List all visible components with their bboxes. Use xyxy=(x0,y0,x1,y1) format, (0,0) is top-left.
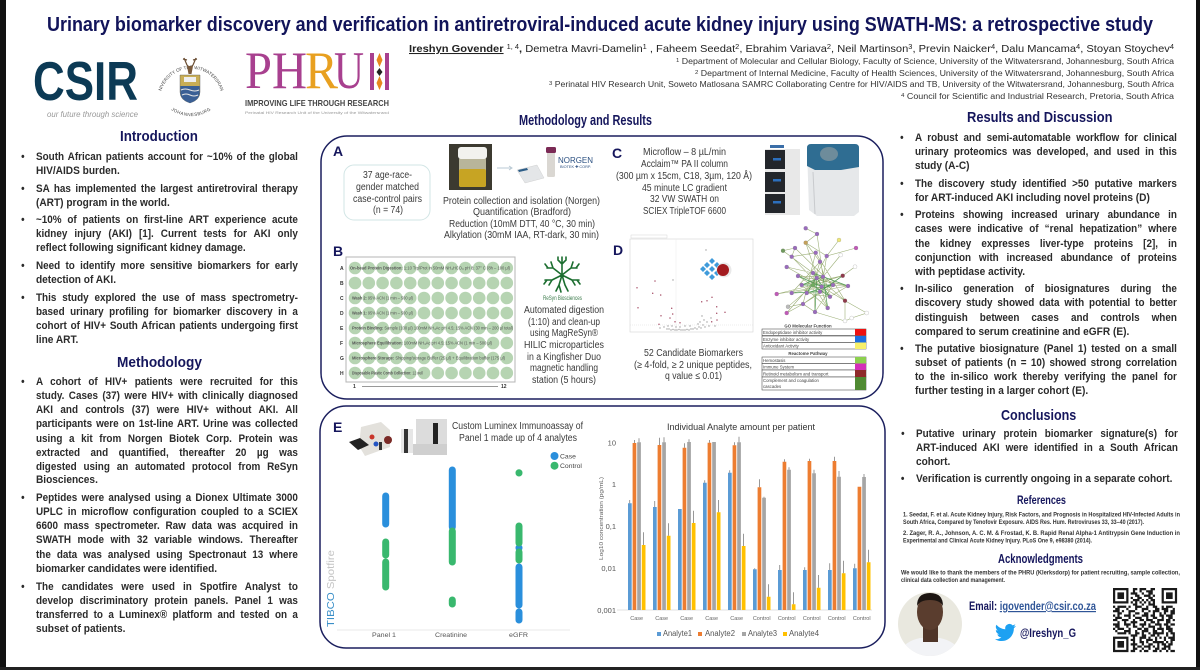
diagram: 96-well plate: 12 xyxy=(501,384,507,390)
chart: individual analyte amount per patient: 1 xyxy=(612,480,616,489)
diagram: 96-well plate: 1 xyxy=(353,384,356,390)
logo: PHRU xyxy=(245,42,389,115)
text block: results bullets: with peptidase activity. xyxy=(915,266,1025,278)
heading: methodology: Methodology xyxy=(117,354,202,371)
text block: introduction bullets xyxy=(21,151,298,346)
text block: results bullets xyxy=(900,132,1177,397)
text block: results bullets: cases were indicative of “renal hepatization” where xyxy=(915,223,1177,235)
text block: automated digestion xyxy=(524,305,604,386)
diagram: 96-well plate: Microsphere Equilibration: 100mM NH₄Ac pH 4.5; 15% ACN (1 min – 500 µl) xyxy=(352,340,492,346)
text block: LC-MS settings xyxy=(616,147,752,217)
text block: methodology bullets: AKI and controls (37) were HIV+ without AKI. All xyxy=(36,404,298,416)
text block: results bullets: the kidney expresses liver-type proteins [2], in xyxy=(915,238,1177,250)
heading: results and discussion: Results and Discussion xyxy=(967,109,1113,126)
text block: methodology bullets: develop discriminatory protein panels. Panel 1 was xyxy=(36,595,298,607)
author list: , xyxy=(519,43,522,55)
callout: case-control pairs xyxy=(344,165,430,220)
text block: sample preparation: Protein collection and isolation (Norgen) xyxy=(443,196,600,207)
icon: Spectronaut logo xyxy=(700,258,732,280)
text block: results bullets: The putative biosignature (Panel 1) tested on a small xyxy=(915,343,1177,355)
affiliations xyxy=(549,57,1175,101)
text block: LC-MS settings: Microflow – 8 µL/min xyxy=(643,147,726,158)
text block: introduction bullets: Need to identify more sensitive biomarkers for early xyxy=(36,260,298,272)
legend: analytes xyxy=(657,629,820,638)
author list: , Faheem Seedat xyxy=(647,43,735,55)
text block: immunoassay title: Panel 1 made up of 4 analytes xyxy=(459,433,577,444)
chart: individual analyte amount per patient: Case xyxy=(705,616,718,622)
author list: Demetra Mavri-Damelin xyxy=(525,43,636,55)
image: Norgen kit: BIOTEK ✚ CORP. xyxy=(560,165,591,169)
legend: analytes: Analyte4 xyxy=(789,629,820,638)
panel: results and discussion: • xyxy=(900,178,904,190)
panel label C: C xyxy=(612,145,622,161)
panel: results and discussion: • xyxy=(900,209,904,221)
text block: sample preparation: Alkylation (30mM IAA, RT-dark, 30 min) xyxy=(444,230,599,241)
text block: methodology bullets: 6600 mass spectrometer. Raw data was acquired in xyxy=(36,520,298,532)
panel: methodology: • xyxy=(21,376,25,388)
text block: introduction bullets: This study explored the use of mass spectrometry- xyxy=(36,292,298,304)
logo: PHRU: U xyxy=(334,42,364,100)
text block: reference list: 2. Zager, R. A., Johnson, A. C. M. & Frostad, K. B. Rapid Renal Alpha-1 Antitrypsin Gene Induction in xyxy=(903,530,1180,537)
chart: individual analyte amount per patient: 0,1 xyxy=(606,522,616,531)
text block: results bullets: urinary proteomics was developed, and used in this xyxy=(915,146,1177,158)
logo: ReSyn Biosciences: ReSyn Biosciences xyxy=(543,296,582,302)
chart: individual analyte amount per patient: Control xyxy=(778,616,796,622)
legend: case and control: Case xyxy=(560,454,576,460)
panel: results and discussion xyxy=(900,109,1177,397)
text block: methodology bullets: The candidates were used in Spotfire Analyst to xyxy=(36,581,298,593)
author list: 4 xyxy=(991,44,995,51)
text block: acknowledgments: clinical data collection and management. xyxy=(901,577,1005,584)
logo: PHRU: PH xyxy=(245,42,307,100)
legend: GO and Reactome xyxy=(762,324,866,390)
chart: strip plot of Panel 1, Creatinine and eGFR xyxy=(326,452,582,639)
affiliations: Perinatal HIV Research Unit, Soweto Matlosana SAMRC Collaborating Centre for HIV/AIDS and TB, University of the Witwatersrand, Johannesburg, South Africa xyxy=(552,80,1175,89)
text block: methodology bullets: digested using an automated protocol from ReSyn xyxy=(36,461,298,473)
logo: CSIR: CSIR xyxy=(33,50,138,112)
image: Norgen kit: NORGEN xyxy=(558,155,593,165)
panel: results and discussion: • xyxy=(900,283,904,295)
text block: conclusions bullets xyxy=(901,428,1178,485)
icon: twitter bird xyxy=(995,624,1016,641)
text block: introduction bullets: kidney injury (AKI) [1]. Current tests for AKI only xyxy=(36,228,298,240)
text block: sample preparation: Reduction (10mM DTT, 40 °C, 30 min) xyxy=(449,219,595,230)
heading: references: References xyxy=(1017,493,1066,507)
chart: volcano plot xyxy=(630,235,753,332)
image: author portrait xyxy=(898,592,962,660)
bars: Analyte3 xyxy=(637,442,866,610)
error bars xyxy=(630,437,869,604)
affiliations: 3 xyxy=(549,81,552,87)
affiliations: Department of Molecular and Cellular Biology, Faculty of Science, University of the Witwatersrand, Johannesburg, South Africa xyxy=(679,57,1175,66)
panel: workflow A to D xyxy=(321,136,883,399)
chart: individual analyte amount per patient xyxy=(597,422,872,638)
panel label A: A xyxy=(333,143,343,159)
text block: introduction bullets: detection of AKI. xyxy=(36,274,116,286)
panel: Luminex verification E xyxy=(320,406,885,648)
legend: case and control xyxy=(550,452,582,470)
panel: conclusions: • xyxy=(901,428,905,440)
text block: candidate biomarkers xyxy=(634,348,752,382)
text block: results bullets: The discovery study identified >50 putative markers xyxy=(915,178,1177,190)
text block: introduction bullets: (ART) program in the world. xyxy=(36,197,170,209)
text block: conclusions bullets: Putative urinary protein biomarker signature(s) for xyxy=(916,428,1178,440)
author list: , Dalu Mancama xyxy=(995,43,1076,55)
text block: methodology bullets: extracted and quantified, thereafter 20 µg was xyxy=(36,447,298,459)
text block: results bullets: distinguish between cases and controls when xyxy=(915,312,1177,324)
legend: GO and Reactome: Immune System xyxy=(763,364,794,370)
text block: immunoassay title xyxy=(452,421,583,444)
affiliations: Council for Scientific and Industrial Research, Pretoria, South Africa xyxy=(904,92,1175,101)
text block: candidate biomarkers: (≥ 4-fold, ≥ 2 unique peptides, xyxy=(634,360,752,371)
logo: University of the Witwatersrand crest xyxy=(158,58,224,116)
heading: introduction: Introduction xyxy=(120,128,198,145)
chart: individual analyte amount per patient: Control xyxy=(753,616,771,622)
text block: automated digestion: using MagReSyn® xyxy=(530,328,599,339)
diagram: 96-well plate xyxy=(340,257,515,390)
image: urine sample cup xyxy=(449,144,492,190)
text block: introduction bullets: ~10% of patients on first-line ART experience acute xyxy=(36,214,298,226)
text block: reference list: Experimental and Clinical Acute Kidney Injury. PLoS One 9, e98380 (2014). xyxy=(903,538,1092,544)
callout: case-control pairs: case-control pairs xyxy=(353,194,422,205)
text block: candidate biomarkers: 52 Candidate Biomarkers xyxy=(644,348,743,359)
text block: results bullets: conjunction with increased abundance of proteins xyxy=(915,252,1177,264)
diagram: 96-well plate: H xyxy=(340,371,344,377)
panel: conclusions: • xyxy=(901,473,904,485)
author list: 1, 4 xyxy=(507,44,519,51)
diagram: 96-well plate: A xyxy=(340,266,344,272)
callout: case-control pairs: 37 age-race- xyxy=(363,170,412,181)
text block: acknowledgments: We would like to thank the members of the PHRU (Klerksdorp) for patient recruiting, sample collection, xyxy=(901,570,1180,576)
legend: GO and Reactome: Complement and coagulation xyxy=(763,378,820,383)
text block: automated digestion: Automated digestion xyxy=(524,305,604,316)
logo: University of the Witwatersrand crest: JOHANNESBURG xyxy=(172,108,210,116)
text block: LC-MS settings: SCIEX TripleTOF 6600 xyxy=(643,206,726,217)
panel: methodology: • xyxy=(21,581,25,593)
text block: introduction bullets: based urinary profiling for biomarker discovery in a xyxy=(36,306,298,318)
text block: conclusions bullets: Verification is currently ongoing in a separate cohort. xyxy=(916,473,1172,485)
chart: individual analyte amount per patient: Control xyxy=(828,616,846,622)
panel: conclusions xyxy=(901,407,1178,485)
logo: CSIR: our future through science xyxy=(47,110,139,119)
panel label D: D xyxy=(613,242,623,258)
diagram: 96-well plate: F xyxy=(340,341,343,347)
text block: acknowledgments xyxy=(901,570,1180,584)
heading: methodology and results: Methodology and Results xyxy=(519,113,652,129)
author list: 1 xyxy=(643,44,647,51)
panel: introduction: • xyxy=(21,183,25,195)
text block: introduction bullets: cohort of HIV+ South African patients undergoing first xyxy=(36,320,298,332)
text block: LC-MS settings: 45 minute LC gradient xyxy=(642,183,727,194)
chart: individual analyte amount per patient: Case xyxy=(730,616,743,622)
text block: sample preparation xyxy=(443,196,600,241)
chart: individual analyte amount per patient: 0,01 xyxy=(601,564,616,573)
legend: GO and Reactome: Hemostasis xyxy=(763,358,785,363)
legend: GO and Reactome: Endopeptidase inhibitor activity xyxy=(763,330,823,335)
legend: GO and Reactome: Retinoid metabolism and transport xyxy=(763,372,829,376)
chart: individual analyte amount per patient: Case xyxy=(655,616,668,622)
text block: results bullets: In-silico generation of biosignatures during the xyxy=(915,283,1177,295)
legend: analytes: Analyte3 xyxy=(748,629,777,638)
legend: GO and Reactome: GO Molecular Function xyxy=(784,324,832,328)
text block: LC-MS settings: (300 µm x 15cm, C18, 3µm, 120 Å) xyxy=(616,169,752,182)
text block: introduction bullets: reflect following significant kidney damage. xyxy=(36,242,246,254)
logo: ReSyn Biosciences xyxy=(543,257,582,302)
logo: PHRU: R xyxy=(305,42,339,100)
heading: acknowledgments: Acknowledgments xyxy=(998,551,1083,566)
text block: methodology bullets xyxy=(21,376,298,635)
text block: sample preparation: Quantification (Bradford) xyxy=(473,207,571,218)
panel: results and discussion: • xyxy=(900,132,904,144)
text block: reference list xyxy=(903,512,1180,544)
author list: , Stoyan Stoychev xyxy=(1080,43,1171,55)
affiliations: 4 xyxy=(901,93,904,99)
affiliations: 2 xyxy=(695,70,698,76)
author list: 2 xyxy=(827,44,831,51)
panel: results and discussion: • xyxy=(900,343,904,355)
panel: introduction: • xyxy=(21,292,25,304)
text block: introduction bullets: HIV/AIDS burden. xyxy=(36,165,120,177)
author list: , Neil Martinson xyxy=(831,43,908,55)
text block: methodology bullets: using a kit from Norgen Biotek Corp. Protein was xyxy=(36,433,298,445)
chart: individual analyte amount per patient: Control xyxy=(853,616,871,622)
panel: introduction: • xyxy=(21,260,25,272)
panel: methodology xyxy=(21,354,298,635)
chart: strip plot of Panel 1, Creatinine and eGFR: Panel 1 xyxy=(372,632,396,639)
chart: strip plot of Panel 1, Creatinine and eGFR: eGFR xyxy=(509,632,528,639)
logo: PHRU: Perinatal HIV Research Unit of the University of the Witwatersrand xyxy=(245,111,389,115)
logo: PHRU: IMPROVING LIFE THROUGH RESEARCH xyxy=(245,98,389,108)
text block: results bullets: to the in-silico work thereby verifying the panel for xyxy=(915,371,1177,383)
text block: methodology bullets: Biosciences. xyxy=(36,474,98,486)
panel label E: E xyxy=(333,419,342,435)
arrow: cup to kit xyxy=(497,166,512,170)
affiliations: Department of Internal Medicine, Faculty of Health Sciences, University of the Witwatersrand, Johannesburg, South Africa xyxy=(698,69,1175,78)
text block: methodology bullets: UPLC in microflow configuration coupled to a SCIEX xyxy=(36,506,298,518)
diagram: 96-well plate: Protein Binding: Sample (100 µl) 100mM NH₄Ac pH 4.5; 15% ACN (30 min – 200 µl total) xyxy=(352,326,513,330)
text block: methodology bullets: study. Cases (37) were HIV+ with clinically diagnosed xyxy=(36,390,298,402)
author list: , Ebrahim Variava xyxy=(739,43,827,55)
text block: methodology bullets: biomarker candidates were identified. xyxy=(36,563,217,575)
text block: results bullets: Proteins showing increased urinary abundance in xyxy=(915,209,1177,221)
text block: introduction bullets: South African patients account for ~10% of the global xyxy=(36,151,298,163)
author list: Ireshyn Govender xyxy=(409,43,504,55)
panel: methodology: • xyxy=(21,492,25,504)
chart: individual analyte amount per patient: Log10 concentration (pg/mL) xyxy=(599,477,605,560)
text block: methodology bullets: SWATH mode with 32 variable windows. Thereafter xyxy=(36,534,298,546)
text block: methodology bullets: participants were on 1st-line ART. Urine was collected xyxy=(36,418,298,430)
text block: results bullets: compared to serum creatinine and eGFR (E). xyxy=(915,326,1129,338)
diagram: 96-well plate: Wash 2: 95% ACN (1 min – 500 µl) xyxy=(352,296,413,300)
text block: methodology bullets: the data was analysed using Spectronaut 13 where xyxy=(36,549,298,561)
chart: strip plot of Panel 1, Creatinine and eGFR: Creatinine xyxy=(435,632,467,639)
text block: methodology bullets: A cohort of HIV+ patients were recruited for this xyxy=(36,376,298,388)
legend: GO and Reactome: Reactome Pathway xyxy=(788,351,828,356)
text block: results bullets: for ART-induced AKI including novel proteins (D) xyxy=(915,192,1150,204)
callout: case-control pairs: (n = 74) xyxy=(373,205,403,216)
legend: analytes: Analyte1 xyxy=(663,629,692,638)
diagram: 96-well plate: Wash 1: 95% ACN (1 min – 500 µl) xyxy=(352,310,413,316)
text block: methodology bullets: subset of patients. xyxy=(36,623,125,635)
author list: 4 xyxy=(1076,44,1080,51)
panel label B: B xyxy=(333,243,343,259)
diagram: 96-well plate: B xyxy=(340,281,344,287)
contact: email: Email: igovender@csir.co.za xyxy=(969,599,1096,613)
panel: acknowledgments xyxy=(901,551,1180,584)
affiliations: 1 xyxy=(676,58,679,64)
legend: GO and Reactome: cascades xyxy=(763,384,781,389)
chart: individual analyte amount per patient: Individual Analyte amount per patient xyxy=(667,422,815,433)
text block: methodology bullets: Peptides were analysed using a Dionex Ultimate 3000 xyxy=(36,492,298,504)
image: Luminex instrument xyxy=(401,419,447,455)
chart: individual analyte amount per patient: Control xyxy=(803,616,821,622)
text block: reference list: South Africa, Compared by Tenofovir Exposure. AIDS Res. Hum. Retroviruses 33, 33–40 (2017). xyxy=(903,519,1144,526)
bars: Analyte1 xyxy=(628,473,857,610)
image: mass spectrometer xyxy=(807,144,859,216)
author list: , Previn Naicker xyxy=(912,43,991,55)
text block: results bullets: further testing in a larger cohort (E). xyxy=(915,385,1088,397)
logo: TIBCO Spotfire: TIBCO Spotfire xyxy=(326,550,337,627)
contact: twitter handle: @Ireshyn_G xyxy=(1020,626,1076,640)
image: Luminex kit xyxy=(349,422,392,456)
image: Norgen kit xyxy=(517,147,593,183)
chart: individual analyte amount per patient: 0,001 xyxy=(597,606,616,615)
author list: 2 xyxy=(735,44,739,51)
text block: LC-MS settings: 32 VW SWATH on xyxy=(650,194,719,205)
diagram: 96-well plate: G xyxy=(340,356,344,362)
heading: conclusions: Conclusions xyxy=(1001,407,1076,424)
diagram: 96-well plate: D xyxy=(340,311,344,317)
diagram: 96-well plate: C xyxy=(340,296,344,302)
text block: automated digestion: in a Kingfisher Duo xyxy=(527,352,601,363)
panel: introduction: • xyxy=(21,151,25,163)
text block: conclusions bullets: cohort. xyxy=(916,456,950,468)
diagram: 96-well plate: On-bead Protein Digestion: 1:10 Trp/Prot in 50mM NH₄HCO₃ pH 8; 37° C (8h – 100 µl) xyxy=(350,266,510,270)
author list: 4 xyxy=(1170,44,1174,51)
text block: candidate biomarkers: q value ≤ 0.01) xyxy=(665,371,722,382)
diagram: 96-well plate: E xyxy=(340,326,344,332)
chart: protein interaction network xyxy=(775,226,869,323)
diagram: 96-well plate: Disposable Plastic Comb Collection: 12 well xyxy=(352,370,423,376)
text block: automated digestion: HILIC microparticles xyxy=(524,340,604,351)
callout: case-control pairs: gender matched xyxy=(356,182,419,193)
text block: conclusions bullets: ART-induced AKI were identified in a South African xyxy=(916,442,1178,454)
text block: introduction bullets: line ART. xyxy=(36,334,78,346)
text block: results bullets: A robust and semi-automatable workflow for clinical xyxy=(915,132,1177,144)
legend: GO and Reactome: Antioxidant Activity xyxy=(763,344,800,348)
legend: analytes: Analyte2 xyxy=(705,629,735,638)
bars: Analyte2 xyxy=(633,443,861,610)
diagram: 96-well plate: Microsphere Storage: Shipping/storage Buffer (25 µl) + Equilibration buffer (175 µl) xyxy=(352,356,505,360)
panel: introduction xyxy=(21,128,298,346)
text block: automated digestion: station (5 hours) xyxy=(532,375,596,386)
text block: introduction bullets: SA has implemented the largest antiretroviral therapy xyxy=(36,183,298,195)
text block: results bullets: study (A-C) xyxy=(915,160,970,172)
text block: results bullets: discovery study showed data with potential to better xyxy=(915,297,1177,309)
chart: individual analyte amount per patient: 10 xyxy=(608,438,616,448)
author list: 3 xyxy=(908,44,913,51)
text block: automated digestion: magnetic handling xyxy=(530,363,598,374)
text block: LC-MS settings: Acclaim™ PA II column xyxy=(641,159,728,170)
chart: individual analyte amount per patient: Case xyxy=(680,616,693,622)
panel: introduction: • xyxy=(21,214,25,226)
panel: references xyxy=(903,493,1180,544)
chart: individual analyte amount per patient: Case xyxy=(630,616,643,622)
text block: methodology bullets: transferred to a Luminex® platform and tested on a xyxy=(36,609,298,621)
image: UPLC stack xyxy=(765,145,800,215)
legend: GO and Reactome: Enzyme inhibitor activity xyxy=(763,337,810,342)
text block: automated digestion: (1:10) and clean-up xyxy=(528,317,600,328)
text block: results bullets: subset of patients (n = 10) showed strong correlation xyxy=(915,357,1177,369)
QR code xyxy=(1113,589,1177,651)
legend: case and control: Control xyxy=(560,463,582,470)
text block: immunoassay title: Custom Luminex Immunoassay of xyxy=(452,421,583,432)
bars: Analyte4 xyxy=(642,512,870,610)
